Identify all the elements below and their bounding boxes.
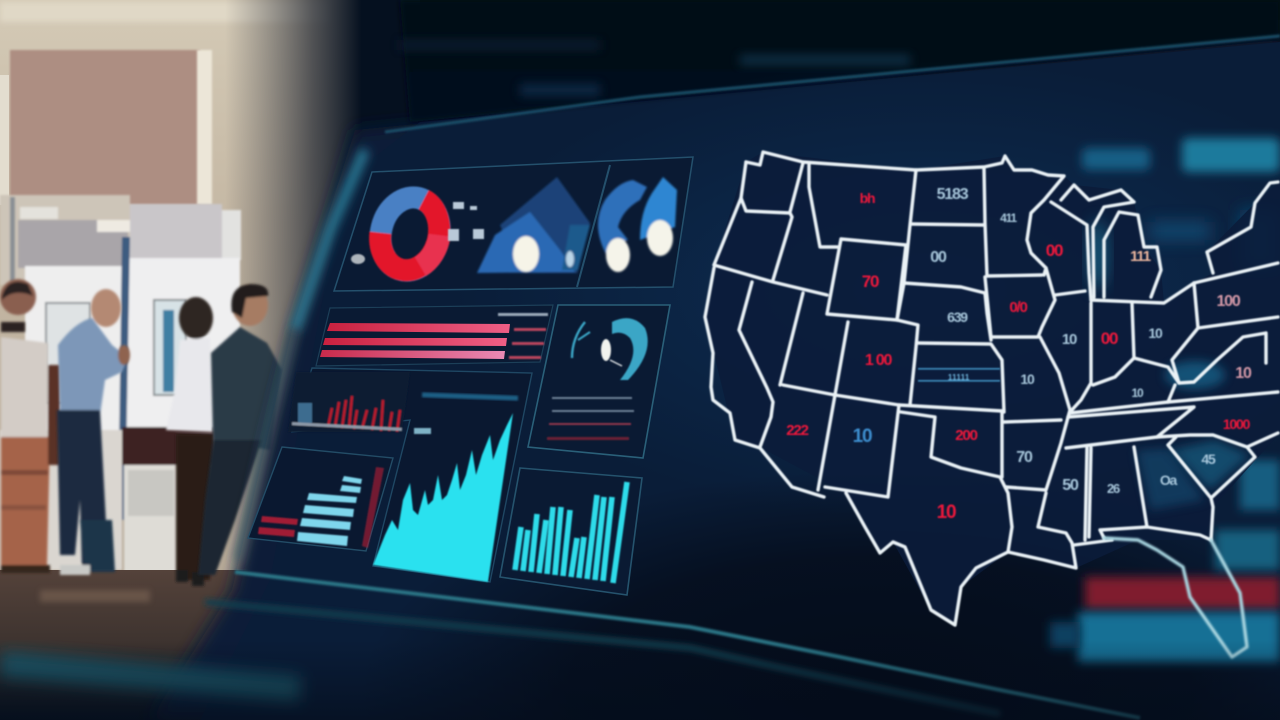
bottom vignette	[0, 640, 1280, 720]
red state values	[786, 190, 1251, 523]
Kentucky, Tennessee, Carolinas	[1070, 392, 1278, 413]
red state values: 00	[1101, 329, 1118, 348]
panel: vertical cyan bars	[500, 468, 642, 595]
blue and white state values: 10	[1020, 371, 1035, 387]
donut chart	[373, 191, 447, 277]
Michigan	[1061, 185, 1134, 297]
red state values: 00	[1046, 241, 1063, 260]
state glows	[1088, 220, 1108, 290]
red state values: 0/0	[1009, 299, 1027, 316]
Florida outline	[1104, 538, 1247, 657]
blue and white state values	[853, 186, 1216, 496]
Iowa, Missouri, Arkansas, Louisiana	[985, 268, 1055, 337]
map: United States state outlines	[705, 152, 1280, 657]
panel: small red bar chart	[288, 372, 410, 432]
pale state values: 111	[1130, 248, 1151, 265]
blue and white state values: 50	[1062, 477, 1079, 494]
New Mexico, Oklahoma, Texas	[825, 405, 899, 497]
red state values: 1 00	[865, 352, 892, 369]
California, Nevada, Utah	[705, 268, 824, 497]
room: pink wall panel	[10, 50, 200, 205]
red state values: 1000	[1223, 416, 1251, 432]
pale state values	[1130, 248, 1252, 382]
Wisconsin, Illinois, Indiana	[1051, 202, 1091, 300]
panel: top row with donut and blue charts	[334, 157, 693, 291]
dashboard	[248, 157, 693, 595]
Ohio, Pennsylvania, New York	[1194, 283, 1278, 328]
northern border, Washington to Minnesota	[746, 152, 1064, 275]
screen glow	[340, 40, 1280, 720]
pale state values: 10	[1235, 365, 1252, 382]
chart: blurred cyan and red bars behind the map	[1050, 138, 1280, 662]
panel: red horizontal bars	[316, 305, 553, 366]
Pacific northwest	[714, 162, 827, 295]
room: floor	[0, 570, 340, 720]
donut legend	[351, 202, 484, 264]
Kansas data strip	[918, 368, 1000, 382]
person: bald man in blue shirt	[57, 289, 130, 575]
person: woman in white top	[0, 279, 60, 573]
blue and white state values: 10	[1062, 331, 1077, 348]
blue and white state values: 10	[853, 426, 872, 447]
red state values: 10	[937, 502, 956, 523]
blue and white state values: 00	[930, 249, 947, 266]
Kansas data strip: 1 1 1 1 1	[948, 373, 970, 382]
bar labels	[498, 313, 548, 359]
red state values: 200	[955, 427, 978, 444]
area chart fill	[373, 413, 513, 582]
state fill	[705, 152, 1280, 625]
panel: horizontal cyan bars	[248, 447, 393, 551]
panel: globe and text	[528, 305, 670, 458]
red state values: 70	[862, 272, 879, 291]
blue and white state values: Oa	[1160, 472, 1178, 488]
room: back partitions	[0, 195, 241, 575]
blue and white state values: 10	[1148, 325, 1163, 341]
blue and white state values: 10	[1132, 386, 1144, 400]
blue and white state values: 26	[1107, 481, 1120, 496]
pale state values: 100	[1216, 293, 1241, 310]
blue mountain chart	[477, 177, 590, 273]
Montana, Wyoming, Dakotas	[809, 165, 837, 247]
red state values: bh	[860, 190, 875, 206]
panel: large area chart	[292, 368, 532, 582]
blue and white state values: 45	[1201, 451, 1216, 467]
red state values: 222	[786, 422, 809, 439]
blue and white state values: 5183	[937, 186, 969, 203]
background: room	[0, 0, 420, 720]
person: woman in white jacket	[166, 297, 213, 586]
blue and white state values: 639	[947, 309, 968, 325]
Mississippi, Alabama, Georgia	[1085, 448, 1087, 540]
blue and white state values: 70	[1016, 449, 1033, 466]
blue and white state values: 411	[1000, 211, 1017, 225]
blue crescent chart	[598, 177, 677, 272]
map: state value labels	[786, 186, 1252, 523]
person: man in denim jacket	[198, 284, 282, 575]
